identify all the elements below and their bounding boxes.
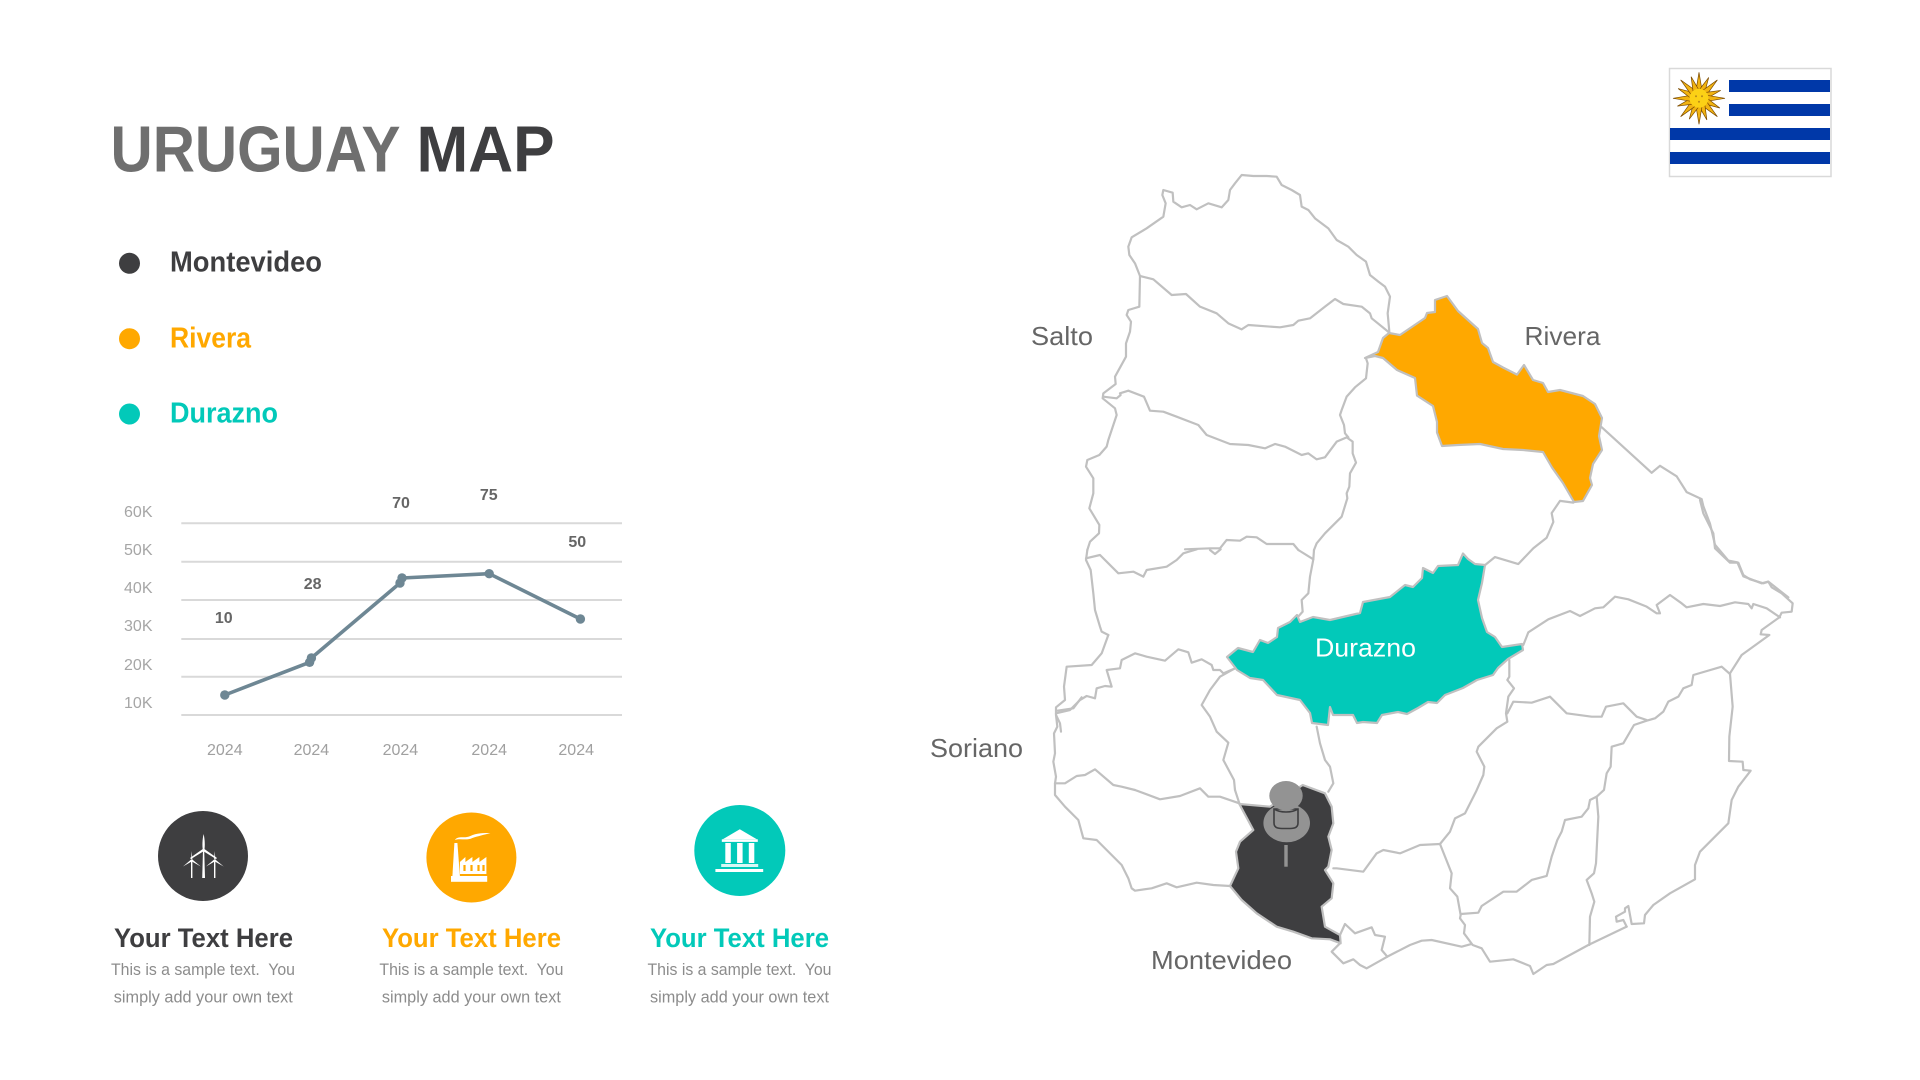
body text <box>111 960 295 1006</box>
legend item: Durazno: Durazno <box>170 397 278 429</box>
legend item: Rivera <box>119 322 252 354</box>
y axis labels: 30K <box>124 618 153 635</box>
legend item: Montevideo: Montevideo <box>170 247 322 279</box>
y axis labels: 10K <box>124 695 153 712</box>
body text: simply add your own text <box>650 988 829 1006</box>
region: Rivera <box>1365 296 1602 502</box>
icon: map pin <box>1263 781 1310 867</box>
map label: Rivera: Rivera <box>1524 321 1601 351</box>
body text <box>648 960 832 1006</box>
region: Montevideo <box>1230 785 1341 943</box>
map label: Montevideo: Montevideo <box>1151 945 1292 975</box>
icon: bank building <box>694 805 785 896</box>
x axis labels: 2024 <box>294 742 329 759</box>
x axis labels: 2024 <box>471 742 507 759</box>
body text: This is a sample text. You <box>111 960 295 979</box>
icon: sun of May <box>1673 72 1725 124</box>
body text: This is a sample text. You <box>379 960 563 979</box>
y axis labels: 20K <box>124 657 153 674</box>
icon: factory <box>426 812 516 902</box>
y axis labels: 40K <box>124 580 153 597</box>
heading: Your Text Here <box>114 923 293 953</box>
data labels <box>215 487 586 627</box>
legend item: Durazno <box>119 397 278 429</box>
column: Your Text Here orange <box>379 812 563 1006</box>
region: Durazno <box>1227 554 1523 725</box>
title: MAP <box>416 113 554 186</box>
icon: wind turbines <box>158 811 248 901</box>
body text: simply add your own text <box>114 988 293 1006</box>
data labels: 75 <box>480 487 498 504</box>
heading: Your Text Here <box>382 923 561 953</box>
title: URUGUAY <box>110 113 400 186</box>
legend item: Rivera: Rivera <box>170 322 252 354</box>
x axis labels <box>207 742 594 759</box>
map of Uruguay <box>930 175 1793 975</box>
map label: Soriano: Soriano <box>930 733 1023 763</box>
y axis labels <box>124 504 153 712</box>
data labels: 50 <box>568 534 586 551</box>
department borders <box>1053 175 1793 974</box>
data labels: 28 <box>304 576 322 593</box>
x axis labels: 2024 <box>558 742 594 759</box>
map label: Salto: Salto <box>1031 321 1093 351</box>
data labels: 70 <box>392 495 410 512</box>
legend <box>119 247 322 429</box>
y axis labels: 60K <box>124 504 153 521</box>
heading: Your Text Here <box>650 923 829 953</box>
flag of Uruguay <box>1670 68 1831 176</box>
line chart <box>124 487 622 759</box>
map label: Durazno: Durazno <box>1315 633 1416 663</box>
column: Your Text Here dark <box>111 811 295 1006</box>
x axis labels: 2024 <box>207 742 243 759</box>
body text: This is a sample text. You <box>648 960 832 979</box>
body text: simply add your own text <box>382 988 561 1006</box>
data labels: 10 <box>215 610 233 627</box>
column: Your Text Here teal <box>648 805 832 1006</box>
body text <box>379 960 563 1006</box>
data line <box>220 569 585 700</box>
y axis labels: 50K <box>124 542 153 559</box>
x axis labels: 2024 <box>383 742 418 759</box>
